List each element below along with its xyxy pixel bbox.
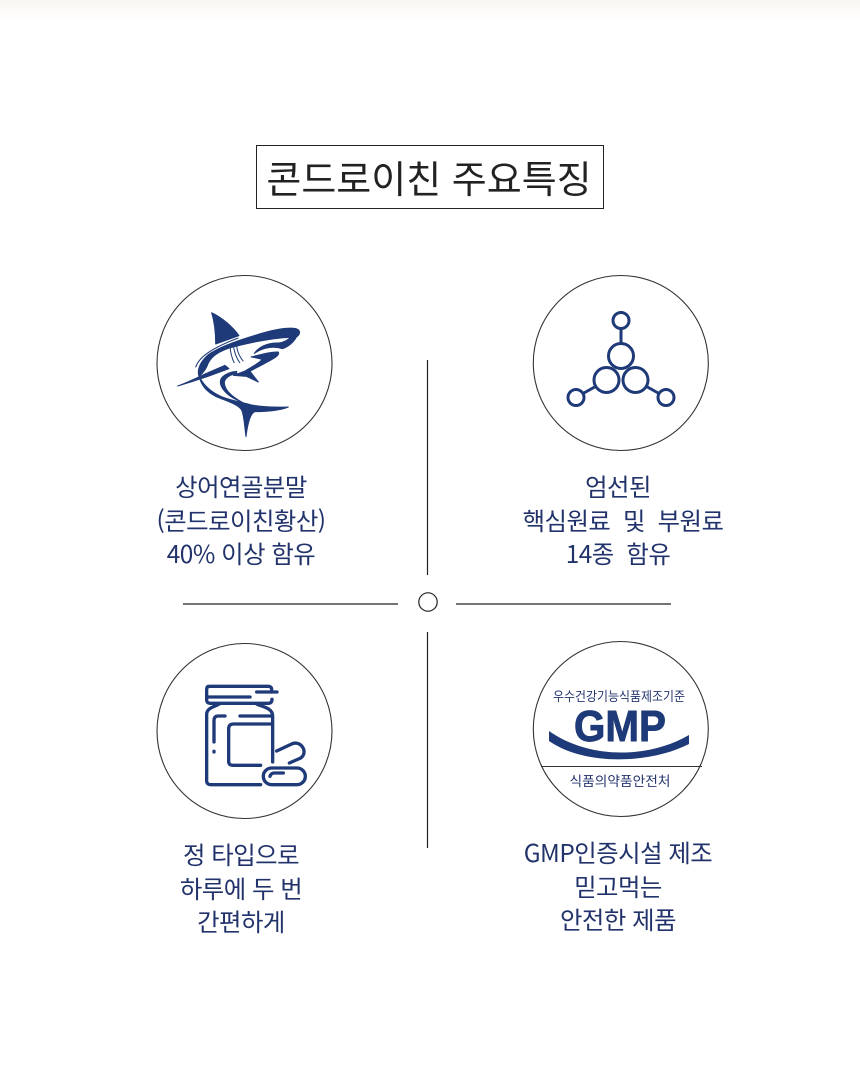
icon: GMP badge: GMP [574, 702, 666, 751]
icon: supplement bottle [157, 644, 332, 818]
text: shark cartilage: 상어연골분말 (콘드로이친황산) 40% 이상 함유 [156, 469, 326, 571]
text: GMP facility: GMP인증시설 제조 믿고먹는 안전한 제품 [524, 835, 712, 937]
icon: GMP badge: 우수건강기능식품제조기준 [553, 686, 685, 705]
icon: GMP badge [533, 642, 708, 816]
text: selected ingredients: 엄선된 핵심원료 및 부원료 14종 함유 [523, 469, 723, 571]
icon: shark [157, 276, 332, 450]
title: 콘드로이친 주요특징 [266, 149, 592, 204]
icon: GMP badge: 식품의약품안전처 [570, 770, 670, 790]
divider lines with centre circle [183, 360, 671, 848]
icon: molecule [533, 276, 708, 450]
text: tablet type: 정 타입으로 하루에 두 번 간편하게 [180, 837, 302, 939]
